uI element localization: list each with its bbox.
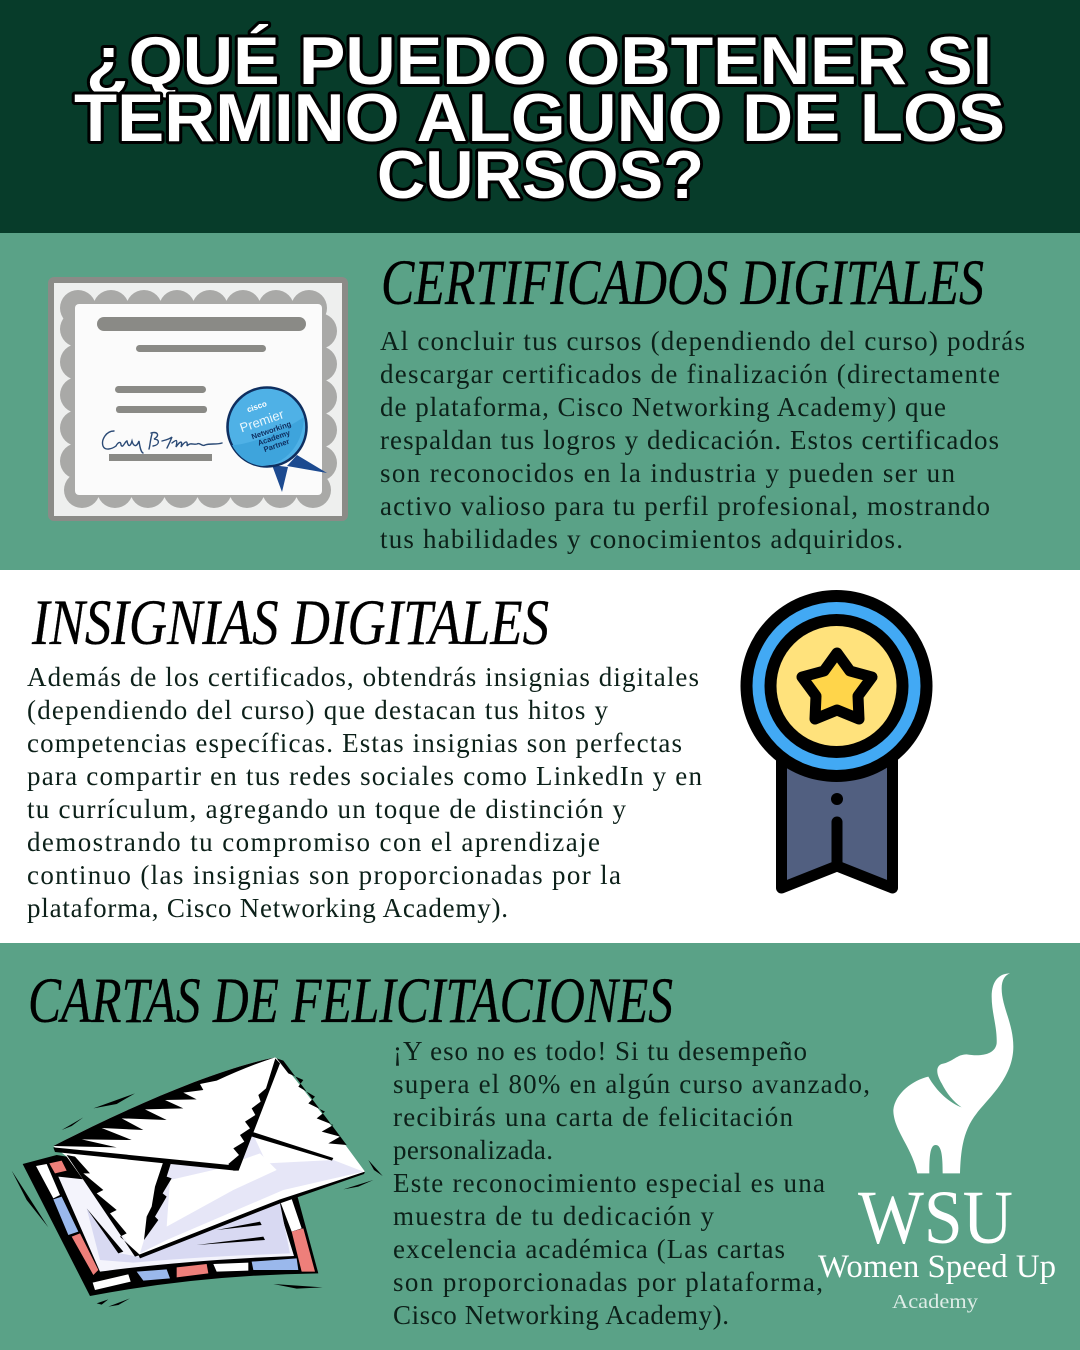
panel: insignias digitales — [0, 570, 1080, 943]
text block: certificados: descargar certificados de finalización (directamente — [380, 359, 1000, 389]
text block: cartas: personalizada. — [393, 1135, 553, 1165]
logo: WSU Women Speed Up Academy: Women Speed Up — [818, 1249, 1056, 1285]
text block: insignias: Además de los certificados, obtendrás insignias digitales — [27, 662, 699, 692]
panel: certificados digitales — [0, 233, 1080, 570]
text block: insignias: (dependiendo del curso) que destacan tus hitos y — [27, 695, 608, 725]
header band — [0, 0, 1080, 233]
title: CURSOS? — [377, 137, 704, 213]
ribbon — [272, 455, 327, 492]
text block: insignias: plataforma, Cisco Networking Academy). — [27, 893, 508, 923]
text block: certificados: son reconocidos en la industria y pueden ser un — [380, 458, 956, 488]
text block: insignias: para compartir en tus redes sociales como LinkedIn y en — [27, 761, 702, 791]
text block: insignias — [27, 662, 702, 923]
text block: insignias: continuo (las insignias son proporcionadas por la — [27, 860, 621, 890]
text block: certificados: activo valioso para tu perfil profesional, mostrando — [380, 491, 990, 521]
text block: cartas: Este reconocimiento especial es una — [393, 1168, 825, 1198]
heading: insignias digitales: INSIGNIAS DIGITALES — [31, 587, 549, 659]
text block: cartas: son proporcionadas por plataforma, — [393, 1267, 823, 1297]
text block: insignias: demostrando tu compromiso con el aprendizaje — [27, 827, 600, 857]
title: TERMINO ALGUNO DE LOS — [74, 80, 1005, 156]
badge — [228, 388, 306, 466]
title: ¿QUÉ PUEDO OBTENER SI — [86, 23, 992, 99]
text block: cartas: muestra de tu dedicación y — [393, 1201, 714, 1231]
signature — [103, 431, 222, 453]
text block: cartas: Cisco Networking Academy). — [393, 1300, 729, 1330]
title — [74, 23, 1005, 213]
text block: certificados: Al concluir tus cursos (dependiendo del curso) podrás — [380, 326, 1025, 356]
icon: envelopes — [12, 1057, 383, 1307]
text block: cartas: recibirás una carta de felicitación — [393, 1102, 794, 1132]
badge: Academy — [256, 428, 292, 448]
text block: certificados: de plataforma, Cisco Networking Academy) que — [380, 392, 946, 422]
text block: cartas — [393, 1036, 870, 1330]
logo: WSU Women Speed Up Academy: WSU — [858, 1176, 1013, 1260]
text block: certificados: tus habilidades y conocimientos adquiridos. — [380, 524, 903, 554]
badge: Premier — [238, 406, 286, 435]
text block: cartas: ¡Y eso no es todo! Si tu desempeño — [393, 1036, 807, 1066]
text block: certificados: respaldan tus logros y dedicación. Estos certificados — [380, 425, 999, 455]
panel: cartas de felicitaciones — [0, 943, 1080, 1350]
icon: certificate — [48, 277, 348, 521]
text block: insignias: competencias específicas. Estas insignias son perfectas — [27, 728, 682, 758]
badge: Partner — [262, 437, 291, 454]
logo: WSU Women Speed Up Academy: Academy — [892, 1291, 978, 1313]
logo: WSU Women Speed Up Academy — [818, 973, 1056, 1313]
text block: cartas: excelencia académica (Las cartas — [393, 1234, 785, 1264]
text block: certificados — [380, 326, 1025, 554]
icon: elephant — [893, 973, 1013, 1173]
text block: insignias: tu currículum, agregando un toque de distinción y — [27, 794, 626, 824]
icon: medal — [740, 590, 932, 888]
badge: Networking — [250, 419, 293, 441]
heading: cartas de felicitaciones: CARTAS DE FELICITACIONES — [28, 965, 673, 1037]
text block: cartas: supera el 80% en algún curso avanzado, — [393, 1069, 870, 1099]
badge: cisco — [246, 399, 268, 414]
